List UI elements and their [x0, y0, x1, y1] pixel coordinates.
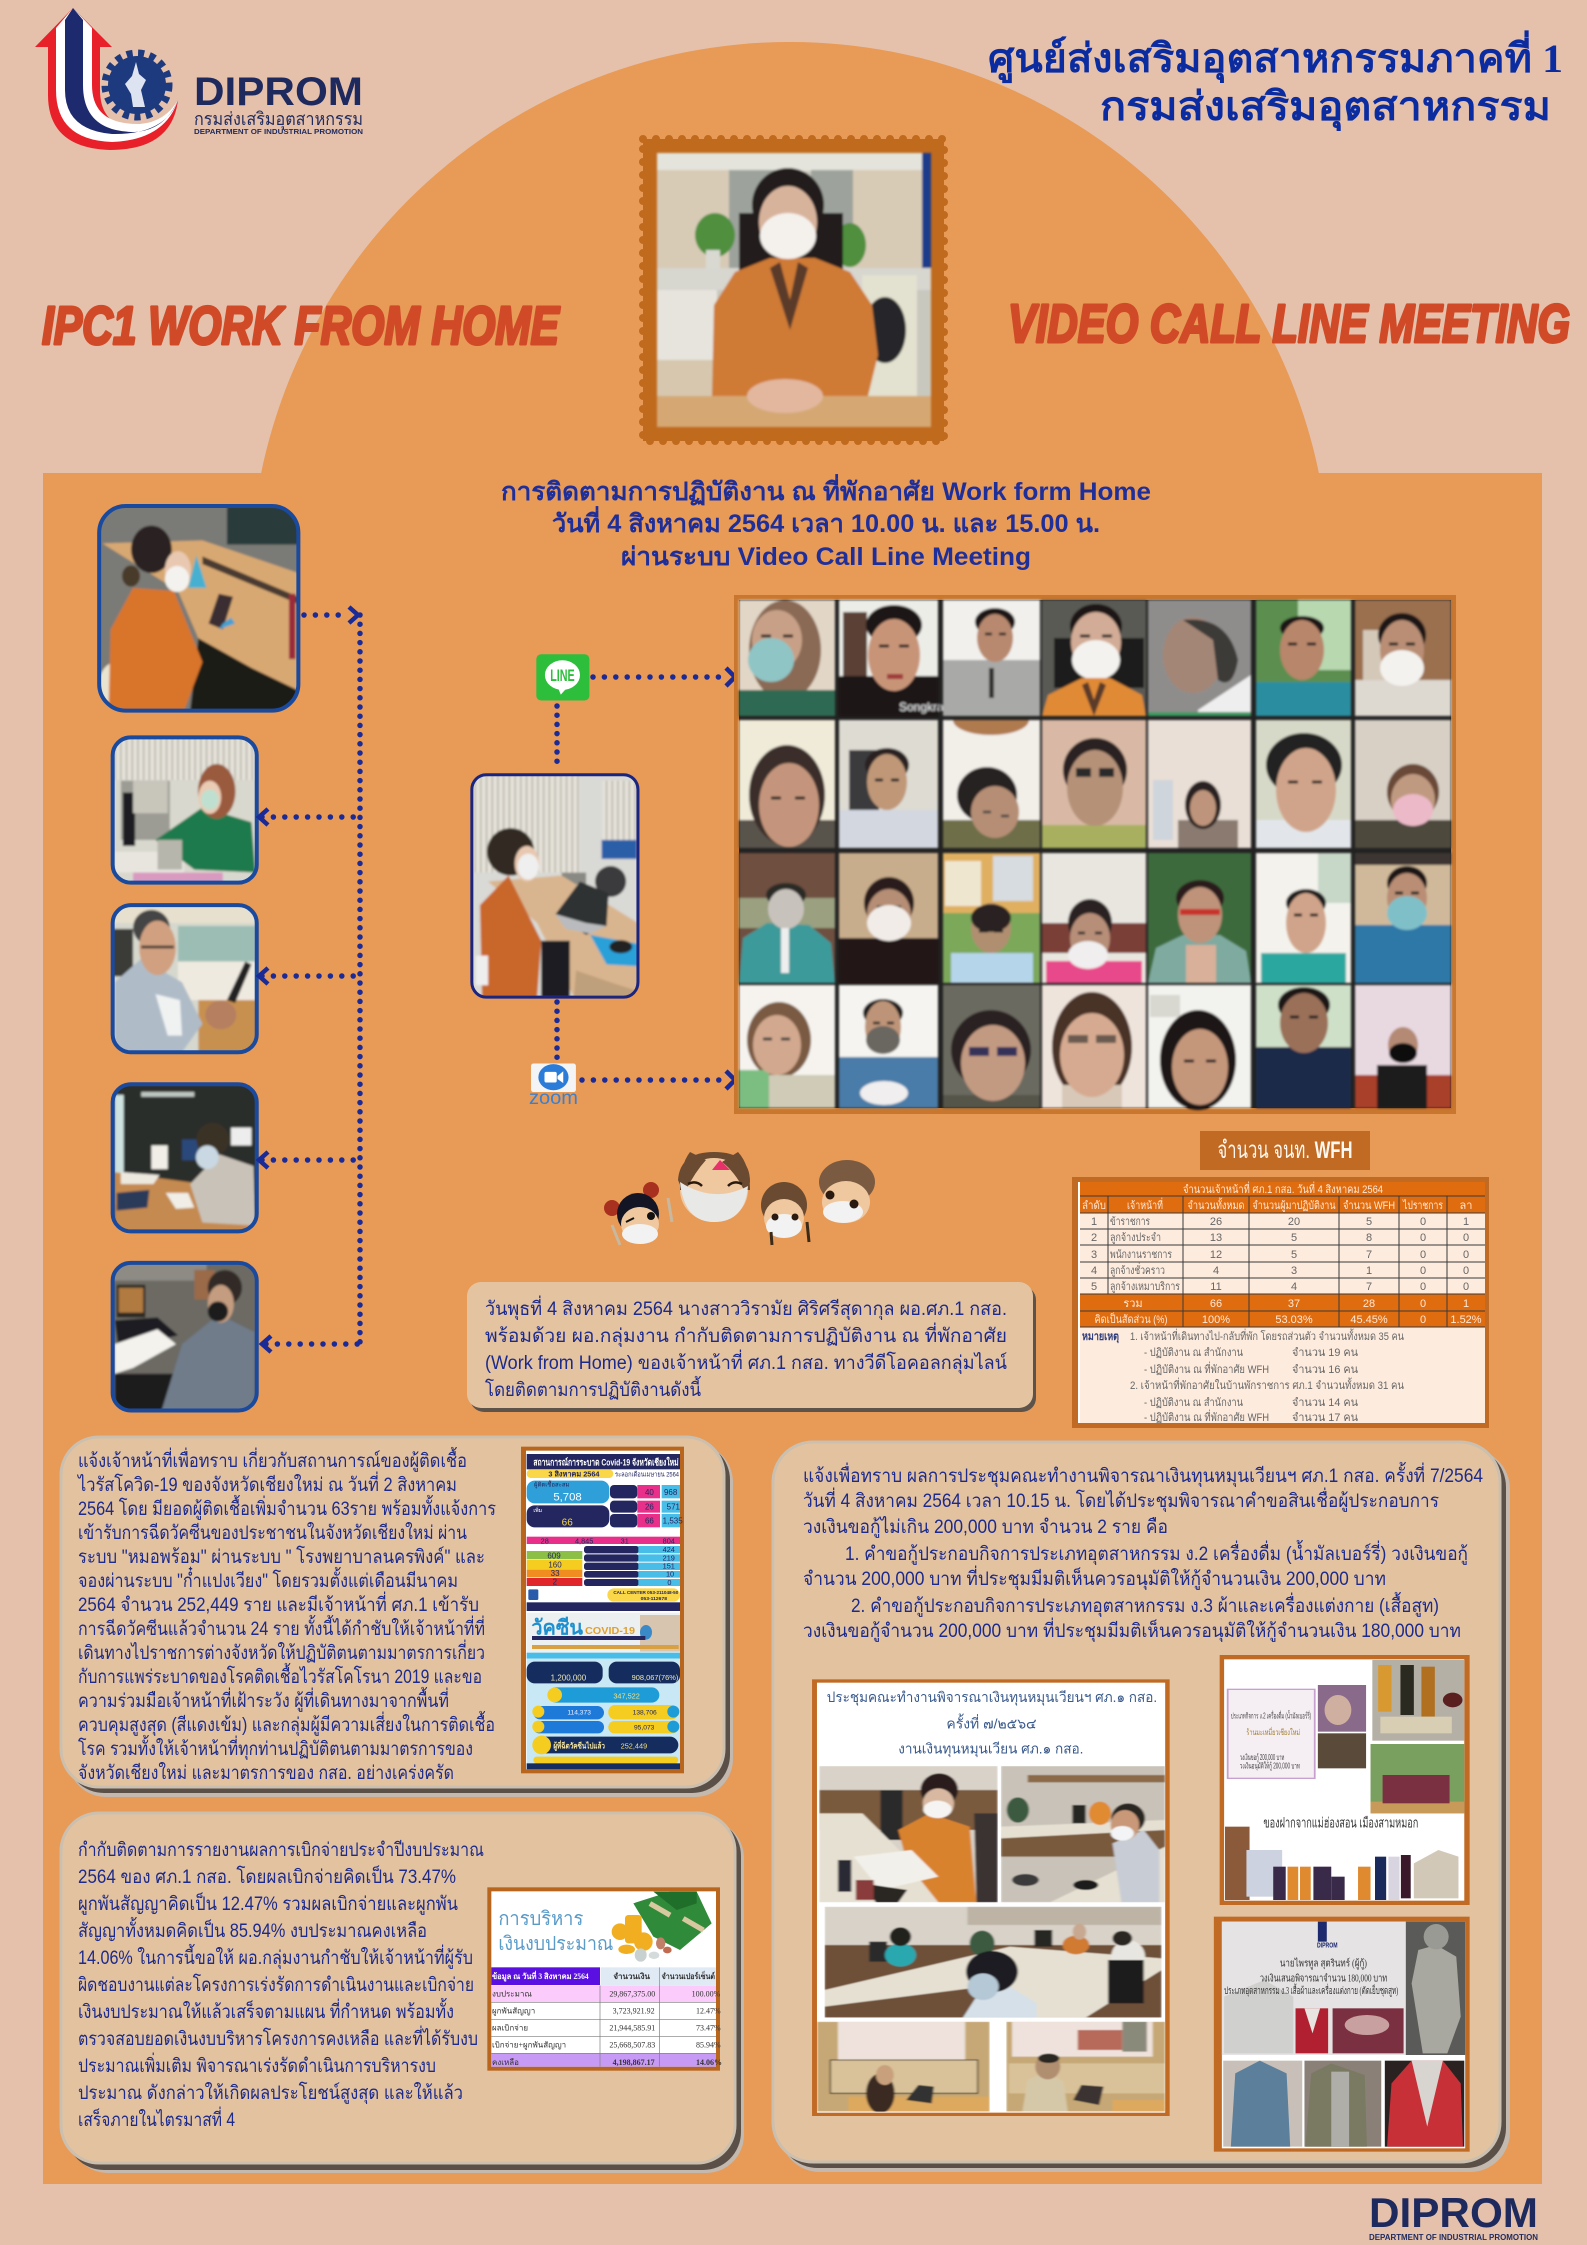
infographic: Chiang Mai covid and vaccine status: 40	[645, 1488, 654, 1497]
title: regional centre name: ศูนย์ส่งเสริมอุตสาหกรรมภาคที่ 1	[988, 30, 1563, 84]
text: budget report body: ผิดชอบงานแต่ละโครงการเร่งรัดการดำเนินงานและเบิกจ่าย	[78, 1973, 474, 1996]
photo collage: mulberry juice product: ร้านมะเหมี่ยวเชียงใหม่	[1246, 1727, 1300, 1738]
text: budget report body: เงินงบประมาณให้แล้วเสร็จตามแผน ที่กำหนด พร้อมทั้ง	[78, 1998, 454, 2023]
photo 2: staff in green at computer	[113, 737, 257, 883]
table: WFH staff numbers: ลูกจ้างประจำ	[1110, 1232, 1161, 1244]
photo collage: committee meeting: ประชุมคณะทำงานพิจารณาเงินทุนหมุนเวียนฯ ศภ.๑ กสอ.	[827, 1689, 1157, 1706]
photo collage: mulberry juice product	[1220, 1655, 1470, 1905]
infographic: Chiang Mai covid and vaccine status: 10	[666, 1570, 674, 1579]
infographic: Chiang Mai covid and vaccine status: 151	[663, 1562, 675, 1571]
table: WFH staff numbers: 45.45%	[1350, 1314, 1388, 1326]
infographic: Chiang Mai covid and vaccine status: ระลอกเดือนเมษายน 2564	[615, 1471, 679, 1479]
heading: Work from Home monitoring	[501, 474, 1151, 571]
table: budget management figures: ข้อมูล ณ วันที่ 3 สิงหาคม 2564	[492, 1970, 589, 1982]
table: WFH staff numbers: จำนวนเจ้าหน้าที่ ศภ.1 กสอ. วันที่ 4 สิงหาคม 2564	[1183, 1181, 1383, 1196]
text: revolving fund meeting body: วันที่ 4 สิงหาคม 2564 เวลา 10.15 น. โดยได้ประชุมพิจารณาคำขอสินเชื่อผู้ประกอบการ	[803, 1487, 1439, 1513]
table: WFH staff numbers: 0	[1420, 1249, 1426, 1261]
table: WFH staff numbers: หมายเหตุ	[1082, 1331, 1119, 1344]
text: revolving fund meeting body: แจ้งเพื่อทราบ ผลการประชุมคณะทำงานพิจารณาเงินทุนหมุนเวียนฯ ศภ.1 กสอ. ครั้งที่ 7/2564	[803, 1462, 1483, 1488]
table: WFH staff numbers: 1	[1463, 1216, 1469, 1228]
infographic: Chiang Mai covid and vaccine status: 804	[663, 1536, 675, 1545]
infographic: Chiang Mai covid and vaccine status: วัคซีน	[531, 1617, 583, 1640]
infographic: Chiang Mai covid and vaccine status: 95,073	[634, 1724, 655, 1731]
table: WFH staff numbers: - ปฏิบัติงาน ณ ที่พักอาศัย WFH	[1144, 1361, 1269, 1376]
table: budget management figures: จำนวนเปอร์เซ็นต์	[662, 1970, 715, 1981]
infographic: Chiang Mai covid and vaccine status: 347,522	[613, 1691, 640, 1700]
table: budget management figures: 29,867,375.00	[609, 1990, 655, 1999]
main orange panel	[43, 473, 1542, 2184]
infographic: Chiang Mai covid and vaccine status: 160	[548, 1560, 562, 1569]
left photos and centre photo group	[98, 506, 638, 1411]
infographic: Chiang Mai covid and vaccine status: 571	[667, 1502, 681, 1511]
table: WFH staff numbers: เจ้าหน้าที่	[1127, 1197, 1163, 1212]
table: WFH staff numbers: 0	[1463, 1281, 1469, 1293]
table: budget management figures: เบิกจ่าย+ผูกพันสัญญา	[492, 2041, 566, 2051]
table: WFH staff numbers: ไปราชการ	[1402, 1199, 1443, 1212]
table: WFH staff numbers: 53.03%	[1275, 1314, 1313, 1326]
photo collage: mulberry juice product: ประเภทกิจการ ง.2 เครื่องดื่ม (น้ำมัลเบอร์รี่)	[1231, 1710, 1311, 1721]
table: WFH staff numbers: จำนวน WFH	[1343, 1200, 1395, 1212]
photo 4: staff writing at table	[113, 1084, 257, 1231]
table: WFH staff numbers: 2	[1091, 1232, 1097, 1244]
table: WFH staff numbers: 0	[1420, 1314, 1426, 1326]
table: budget management figures: 12.47%	[696, 2007, 721, 2016]
table: WFH staff numbers: จำนวนทั้งหมด	[1188, 1197, 1244, 1212]
logo: DIPROM top left	[35, 8, 363, 150]
infographic: Chiang Mai covid and vaccine status: 31	[621, 1536, 629, 1545]
infographic: Chiang Mai covid and vaccine status: 908,067(76%)	[632, 1673, 678, 1682]
text: budget report body: กำกับติดตามการรายงานผลการเบิกจ่ายประจำปีงบประมาณ	[78, 1839, 484, 1861]
text: covid notice body: กับการแพร่ระบาดของโรคติดเชื้อไวรัสโคโรนา 2019 และขอ	[78, 1663, 482, 1688]
text: revolving fund meeting body: วงเงินขอกู้จำนวน 200,000 บาท ที่ประชุมมีมติเห็นควรอนุมัติให้กู้จำนวนเงิน 180,000 บาท	[803, 1617, 1461, 1643]
icon: Zoom app: zoom	[529, 1088, 578, 1109]
table: budget management figures: จำนวนเงิน	[613, 1972, 651, 1981]
photo collage: committee meeting: ครั้งที่ ๗/๒๕๖๔	[946, 1713, 1037, 1732]
icon: LINE app	[536, 654, 589, 701]
table: WFH staff numbers: 0	[1420, 1232, 1426, 1244]
table: WFH staff numbers: 100%	[1202, 1314, 1230, 1326]
table: budget management figures: การบริหาร	[498, 1909, 583, 1930]
logo: DIPROM bottom right: DIPROM	[1369, 2189, 1538, 2236]
participant row 4	[739, 985, 1451, 1110]
infographic: Chiang Mai covid and vaccine status: 26	[645, 1502, 654, 1511]
infographic: Chiang Mai covid and vaccine status: 968	[664, 1488, 678, 1497]
table: WFH staff numbers: 20	[1288, 1216, 1300, 1228]
photo collage: mulberry juice product: ของฝากจากแม่ฮ่องสอน เมืองสามหมอก	[1263, 1815, 1418, 1831]
icon: LINE app: LINE	[550, 667, 575, 686]
table: WFH staff numbers: 28	[1363, 1298, 1375, 1310]
text: covid notice body: การฉีดวัคซีนแล้วจำนวน 24 ราย ทั้งนี้ได้กำชับให้เจ้าหน้าที่ที่	[78, 1615, 485, 1640]
infographic: Chiang Mai covid and vaccine status: 28	[541, 1536, 549, 1545]
table: WFH staff numbers: ลูกจ้างชั่วคราว	[1110, 1262, 1165, 1277]
label: WFH staff count	[1200, 1131, 1370, 1170]
table: WFH staff numbers: 8	[1366, 1232, 1372, 1244]
infographic: Chiang Mai covid and vaccine status: CALL CENTER 053-211048-50	[613, 1590, 679, 1596]
photo collage: suit tailoring product: DIPROM	[1317, 1941, 1338, 1949]
infographic: Chiang Mai covid and vaccine status: 138,706	[633, 1710, 657, 1717]
table: WFH staff numbers: พนักงานราชการ	[1110, 1249, 1172, 1261]
table: WFH staff numbers: ลำดับ	[1082, 1200, 1106, 1212]
table: WFH staff numbers: 4	[1091, 1265, 1097, 1277]
infographic: Chiang Mai covid and vaccine status: 3 สิงหาคม 2564	[548, 1470, 600, 1479]
text box: summary of meeting	[467, 1282, 1036, 1412]
table: WFH staff numbers: - ปฏิบัติงาน ณ ที่พักอาศัย WFH	[1144, 1409, 1269, 1424]
table: WFH staff numbers: 13	[1210, 1232, 1222, 1244]
panel: revolving fund meeting results	[773, 1442, 1510, 2172]
infographic: Chiang Mai covid and vaccine status: COVID-19	[585, 1626, 635, 1637]
text: budget report body: ผูกพันสัญญาคิดเป็น 12.47% รวมผลเบิกจ่ายและผูกพัน	[78, 1891, 458, 1915]
infographic: Chiang Mai covid and vaccine status: 66	[562, 1517, 573, 1528]
text: covid notice body	[76, 1447, 496, 1784]
table: WFH staff numbers: 3	[1091, 1249, 1097, 1261]
label: WFH staff count: จำนวน จนท. WFH	[1218, 1137, 1352, 1164]
heading: Work from Home monitoring: วันที่ 4 สิงหาคม 2564 เวลา 10.00 น. และ 15.00 น.	[552, 506, 1100, 538]
table: WFH staff numbers: จำนวน 19 คน	[1292, 1347, 1358, 1359]
table: budget management figures: งบประมาณ	[492, 1990, 532, 1999]
participant row 1: Songkra	[899, 700, 944, 714]
panel: covid situation notice	[61, 1437, 733, 1797]
text: covid notice body: เข้ารับการฉีดวัคซีนของประชาชนในจังหวัดเชียงใหม่ ผ่าน	[78, 1522, 467, 1544]
text: budget report body: ตรวจสอบยอดเงินงบบริหารโครงการคงเหลือ และที่ได้รับงบ	[78, 2025, 478, 2050]
table: WFH staff numbers: 5	[1291, 1232, 1297, 1244]
text: revolving fund meeting body: 1. คำขอกู้ประกอบกิจการประเภทอุตสาหกรรม ง.2 เครื่องดื่ม (น้ำมัลเบอร์รี่) วงเงินขอกู้	[845, 1540, 1468, 1566]
table: budget management figures: 21,944,585.91	[609, 2024, 655, 2033]
table: WFH staff numbers: 5	[1291, 1249, 1297, 1261]
table: WFH staff numbers: จำนวน 17 คน	[1292, 1412, 1358, 1424]
icon: masked cartoon faces	[604, 1152, 875, 1245]
arrows: dotted connectors	[259, 607, 735, 1352]
table: WFH staff numbers: รวม	[1123, 1298, 1143, 1310]
text: covid notice body: จองผ่านระบบ "ก๋ำแปงเวียง" โดยรวมตั้งแต่เดือนมีนาคม	[78, 1566, 458, 1592]
photo collage: suit tailoring product: นายไพรทูล สุตรินทร์ (ผู้กู้)	[1280, 1957, 1367, 1970]
table: WFH staff numbers: 1	[1366, 1265, 1372, 1277]
title: regional centre name: กรมส่งเสริมอุตสาหกรรม	[1100, 84, 1551, 132]
text: budget report body: สัญญาทั้งหมดคิดเป็น 85.94% งบประมาณคงเหลือ	[78, 1917, 427, 1942]
table: WFH staff numbers: 1	[1463, 1298, 1469, 1310]
table: WFH staff numbers: - ปฏิบัติงาน ณ สำนักงาน	[1144, 1397, 1243, 1409]
table: budget management figures: 25,668,507.83	[609, 2041, 655, 2050]
infographic: Chiang Mai covid and vaccine status: 219	[663, 1553, 675, 1562]
logo: DIPROM bottom right: DEPARTMENT OF INDUSTRIAL PROMOTION	[1369, 2233, 1538, 2242]
photo grid: zoom video call participants	[734, 595, 1456, 1114]
table: WFH staff numbers: 0	[1420, 1216, 1426, 1228]
table: budget management figures: คงเหลือ	[492, 2058, 519, 2067]
table: WFH staff numbers	[1072, 1177, 1489, 1428]
photo collage: suit tailoring product: วงเงินเสนอพิจารณาจำนวน 180,000 บาท	[1260, 1972, 1387, 1984]
text: covid notice body: 2564 โดย มียอดผู้ติดเชื้อเพิ่มจำนวน 63ราย พร้อมทั้งแจ้งการ	[78, 1495, 496, 1520]
table: budget management figures: 4,198,867.17	[613, 2058, 655, 2067]
table: WFH staff numbers: 7	[1366, 1249, 1372, 1261]
table: WFH staff numbers: 1.52%	[1450, 1314, 1482, 1326]
infographic: Chiang Mai covid and vaccine status: 252,449	[621, 1741, 647, 1750]
text box: summary of meeting: วันพุธที่ 4 สิงหาคม 2564 นางสาววิรามัย ศิริศรีสุดากุล ผอ.ศภ.1 กสอ.	[485, 1295, 1007, 1321]
heading: IPC1 work from home: IPC1 WORK FROM HOME	[42, 296, 561, 356]
photo: staff on laptop video call (centre)	[472, 775, 638, 997]
table: WFH staff numbers: 66	[1210, 1298, 1222, 1310]
text: budget report body: เสร็จภายในไตรมาสที่ 4	[78, 2106, 235, 2131]
table: budget management figures: เงินงบประมาณ	[498, 1934, 613, 1955]
table: WFH staff numbers: 5	[1091, 1281, 1097, 1293]
photo 1: director with tablet	[98, 506, 298, 711]
photo 5: man at laptop on desk	[113, 1263, 257, 1411]
text: covid notice body: ความร่วมมือเจ้าหน้าที่เฝ้าระวัง ผู้ที่เดินทางมาจากพื้นที่	[78, 1687, 449, 1712]
table: WFH staff numbers: ลา	[1460, 1200, 1472, 1212]
table: budget management figures: 73.47%	[696, 2024, 721, 2033]
photo: director at desk with scalloped frame	[643, 139, 944, 441]
text: covid notice body: โรค รวมทั้งให้เจ้าหน้าที่ทุกท่านปฏิบัติตนตามมาตรการของ	[78, 1735, 473, 1761]
infographic: Chiang Mai covid and vaccine status: 0	[667, 1578, 671, 1587]
participant row 2	[739, 720, 1451, 848]
table: WFH staff numbers: 1	[1091, 1216, 1097, 1228]
table: WFH staff numbers: 0	[1420, 1281, 1426, 1293]
photo collage: mulberry juice product: วงเงินขอกู้ 200,000 บาท	[1240, 1753, 1284, 1763]
table: WFH staff numbers: 0	[1463, 1249, 1469, 1261]
table: WFH staff numbers: 0	[1420, 1298, 1426, 1310]
participant row 1	[739, 600, 1451, 716]
text: budget report body: ประมาณ ดังกล่าวให้เกิดผลประโยชน์สูงสุด และให้แล้ว	[78, 2081, 463, 2105]
text: budget report body: ประมาณเพิ่มเติม พิจารณาเร่งรัดดำเนินการบริหารงบ	[78, 2052, 436, 2077]
table: WFH staff numbers: คิดเป็นสัดส่วน (%)	[1094, 1312, 1168, 1326]
table: WFH staff numbers: - ปฏิบัติงาน ณ สำนักงาน	[1144, 1347, 1243, 1359]
table: WFH staff numbers: 0	[1463, 1265, 1469, 1277]
text: covid notice body: เดินทางไปราชการต่างจังหวัดให้ปฏิบัติตนตามมาตรการเกี่ยว	[78, 1639, 485, 1664]
table: WFH staff numbers: 12	[1210, 1249, 1222, 1261]
table: budget management figures: ผลเบิกจ่าย	[492, 2024, 528, 2033]
text box: summary of meeting: โดยติดตามการปฏิบัติงานดังนี้	[485, 1376, 701, 1401]
participant row 3	[739, 853, 1451, 983]
text: revolving fund meeting body: วงเงินขอกู้ไม่เกิน 200,000 บาท จำนวน 2 ราย คือ	[803, 1516, 1168, 1538]
text: budget report body: 14.06% ในการนี้ขอให้ ผอ.กลุ่มงานกำชับให้เจ้าหน้าที่ผู้รับ	[78, 1944, 473, 1970]
infographic: Chiang Mai covid and vaccine status: เพิ่ม	[533, 1506, 542, 1514]
table: budget management figures: 3,723,921.92	[613, 2007, 655, 2016]
table: WFH staff numbers: 4	[1291, 1281, 1297, 1293]
text: revolving fund meeting body: 2. คำขอกู้ประกอบกิจการประเภทอุตสาหกรรม ง.3 ผ้าและเครื่องแต่งกาย (เสื้อสูท)	[851, 1592, 1439, 1618]
table: WFH staff numbers: 0	[1463, 1232, 1469, 1244]
table: WFH staff numbers: จำนวน 14 คน	[1292, 1397, 1358, 1409]
logo: DIPROM top left: DEPARTMENT OF INDUSTRIAL PROMOTION	[194, 127, 363, 136]
table: WFH staff numbers: จำนวน 16 คน	[1292, 1364, 1358, 1376]
table: budget management figures	[487, 1887, 722, 2071]
panel: budget disbursement report	[61, 1813, 744, 2173]
infographic: Chiang Mai covid and vaccine status: 609	[547, 1551, 561, 1560]
table: WFH staff numbers: 4	[1213, 1265, 1219, 1277]
infographic: Chiang Mai covid and vaccine status: 1,535	[663, 1516, 683, 1525]
infographic: Chiang Mai covid and vaccine status: 66	[645, 1516, 654, 1525]
title: regional centre name	[988, 30, 1563, 132]
infographic: Chiang Mai covid and vaccine status: 33	[551, 1569, 560, 1578]
table: WFH staff numbers: ข้าราชการ	[1110, 1216, 1150, 1228]
photo collage: mulberry juice product: วงเงินอนุมัติให้กู้ 200,000 บาท	[1240, 1761, 1300, 1771]
heading: Work from Home monitoring: ผ่านระบบ Video Call Line Meeting	[621, 543, 1031, 571]
photo collage: suit tailoring product	[1214, 1917, 1470, 2152]
table: WFH staff numbers: 7	[1366, 1281, 1372, 1293]
text: covid notice body: ควบคุมสูงสุด (สีแดงเข้ม) และกลุ่มผู้มีความเสี่ยงในการติดเชื้อ	[78, 1711, 495, 1737]
infographic: Chiang Mai covid and vaccine status	[521, 1447, 684, 1773]
text: revolving fund meeting body	[803, 1462, 1483, 1643]
table: WFH staff numbers: ลูกจ้างเหมาบริการ	[1110, 1281, 1180, 1293]
text: covid notice body: จังหวัดเชียงใหม่ และมาตรการของ กสอ. อย่างเคร่งครัด	[78, 1762, 454, 1784]
photo collage: suit tailoring product: ประเภทอุตสาหกรรม ง.3 เสื้อผ้าและเครื่องแต่งกาย (ตัดเย็บชุดสูท)	[1224, 1983, 1398, 1997]
table: WFH staff numbers: 0	[1420, 1265, 1426, 1277]
table: WFH staff numbers: จำนวนผู้มาปฏิบัติงาน	[1252, 1200, 1336, 1212]
text: covid notice body: ระบบ "หมอพร้อม" ผ่านระบบ " โรงพยาบาลนครพิงค์" และ	[78, 1545, 485, 1568]
table: WFH staff numbers: 37	[1288, 1298, 1300, 1310]
infographic: Chiang Mai covid and vaccine status: 424	[663, 1545, 675, 1554]
photo 3: man with tablet	[113, 905, 257, 1052]
infographic: Chiang Mai covid and vaccine status: ผู้ที่ฉีดวัคซีนไปแล้ว	[553, 1739, 605, 1751]
infographic: Chiang Mai covid and vaccine status: ผู้ติดเชื้อสะสม	[534, 1479, 569, 1489]
table: budget management figures: 100.00%	[692, 1990, 721, 1999]
infographic: Chiang Mai covid and vaccine status: 1,200,000	[551, 1674, 587, 1683]
table: budget management figures: ผูกพันสัญญา	[492, 2007, 535, 2017]
icon: Zoom app	[529, 1064, 578, 1109]
photo collage: committee meeting	[812, 1679, 1170, 2116]
text: budget report body	[78, 1839, 484, 2131]
table: WFH staff numbers: 1. เจ้าหน้าที่เดินทางไป-กลับที่พัก โดยรถส่วนตัว จำนวนทั้งหมด 35 คน	[1130, 1328, 1404, 1343]
logo: DIPROM top left: DIPROM	[194, 70, 363, 114]
photo collage: committee meeting: งานเงินทุนหมุนเวียน ศภ.๑ กสอ.	[898, 1741, 1083, 1758]
text: covid notice body: ไวรัสโควิด-19 ของจังหวัดเชียงใหม่ ณ วันที่ 2 สิงหาคม	[76, 1471, 457, 1496]
heading: Work from Home monitoring: การติดตามการปฏิบัติงาน ณ ที่พักอาศัย Work form Home	[501, 474, 1151, 506]
arch shape	[250, 42, 1330, 1122]
text box: summary of meeting: (Work from Home) ของเจ้าหน้าที่ ศภ.1 กสอ. ทางวีดีโอคอลกลุ่มไลน์	[485, 1349, 1007, 1375]
table: WFH staff numbers: 2. เจ้าหน้าที่พักอาศัยในบ้านพักราชการ ศภ.1 จำนวนทั้งหมด 31 คน	[1130, 1377, 1404, 1392]
infographic: Chiang Mai covid and vaccine status: สถานการณ์การระบาด Covid-19 จังหวัดเชียงใหม่	[533, 1457, 679, 1468]
table: budget management figures: 85.94%	[696, 2041, 721, 2050]
table: WFH staff numbers: 5	[1366, 1216, 1372, 1228]
table: WFH staff numbers: 3	[1291, 1265, 1297, 1277]
infographic: Chiang Mai covid and vaccine status: 4,845	[575, 1536, 593, 1545]
infographic: Chiang Mai covid and vaccine status: 053-112678	[641, 1596, 667, 1602]
text: revolving fund meeting body: จำนวน 200,000 บาท ที่ประชุมมีมติเห็นควรอนุมัติให้กู้จำนวนเงิน 200,000 บาท	[803, 1565, 1386, 1591]
text: covid notice body: แจ้งเจ้าหน้าที่เพื่อทราบ เกี่ยวกับสถานการณ์ของผู้ติดเชื้อ	[78, 1447, 467, 1472]
infographic: Chiang Mai covid and vaccine status: 114,373	[567, 1710, 591, 1717]
table: budget management figures: 14.06%	[696, 2058, 722, 2067]
infographic: Chiang Mai covid and vaccine status: 5,708	[553, 1492, 582, 1504]
text: budget report body: 2564 ของ ศภ.1 กสอ. โดยผลเบิกจ่ายคิดเป็น 73.47%	[78, 1864, 456, 1888]
text: covid notice body: 2564 จำนวน 252,449 ราย และมีเจ้าหน้าที่ ศภ.1 เข้ารับ	[78, 1591, 479, 1616]
text box: summary of meeting: พร้อมด้วย ผอ.กลุ่มงาน กำกับติดตามการปฏิบัติงาน ณ ที่พักอาศัย	[485, 1322, 1007, 1348]
table: WFH staff numbers: 11	[1210, 1281, 1222, 1293]
table: WFH staff numbers: 26	[1210, 1216, 1222, 1228]
logo: DIPROM top left: กรมส่งเสริมอุตสาหกรรม	[194, 109, 363, 130]
infographic: Chiang Mai covid and vaccine status: 2	[553, 1578, 558, 1587]
